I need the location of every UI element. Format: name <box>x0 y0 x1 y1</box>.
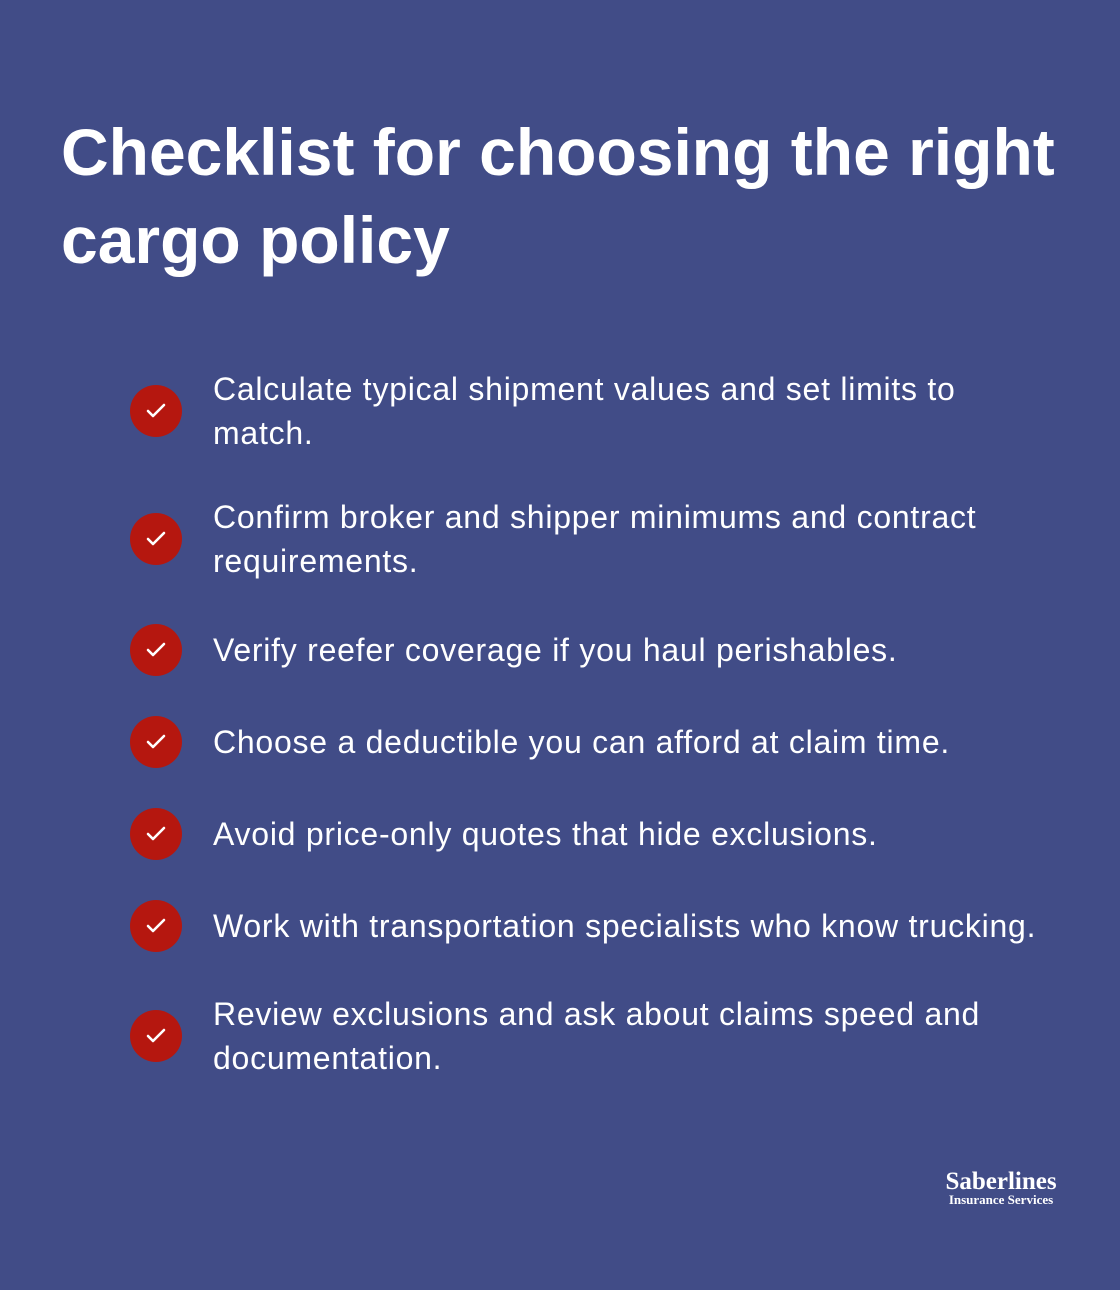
item 6: Work with transportation specialists who know trucking. <box>213 908 1036 944</box>
item 7: Review exclusions and ask about claims speed and documentation. <box>213 996 980 1076</box>
item 4: Choose a deductible you can afford at claim time. <box>213 724 950 760</box>
icon: check <box>130 385 182 437</box>
item 6 <box>130 900 1036 952</box>
logo <box>945 1168 1057 1207</box>
title <box>61 115 1055 277</box>
item 2: Confirm broker and shipper minimums and contract requirements. <box>213 499 976 579</box>
item 3 <box>130 624 898 676</box>
item 5: Avoid price-only quotes that hide exclusions. <box>213 816 878 852</box>
logo: Saberlines <box>945 1168 1057 1195</box>
icon: check <box>130 624 182 676</box>
item 1: Calculate typical shipment values and set limits to match. <box>213 371 956 451</box>
icon: check <box>130 808 182 860</box>
title: Checklist for choosing the right <box>61 115 1055 189</box>
icon: check <box>130 900 182 952</box>
item 5 <box>130 808 878 860</box>
icon: check <box>130 716 182 768</box>
item 3: Verify reefer coverage if you haul perishables. <box>213 632 898 668</box>
icon: check <box>130 1010 182 1062</box>
title: cargo policy <box>61 203 450 277</box>
item 4 <box>130 716 950 768</box>
icon: check <box>130 513 182 565</box>
logo: Insurance Services <box>949 1192 1053 1207</box>
